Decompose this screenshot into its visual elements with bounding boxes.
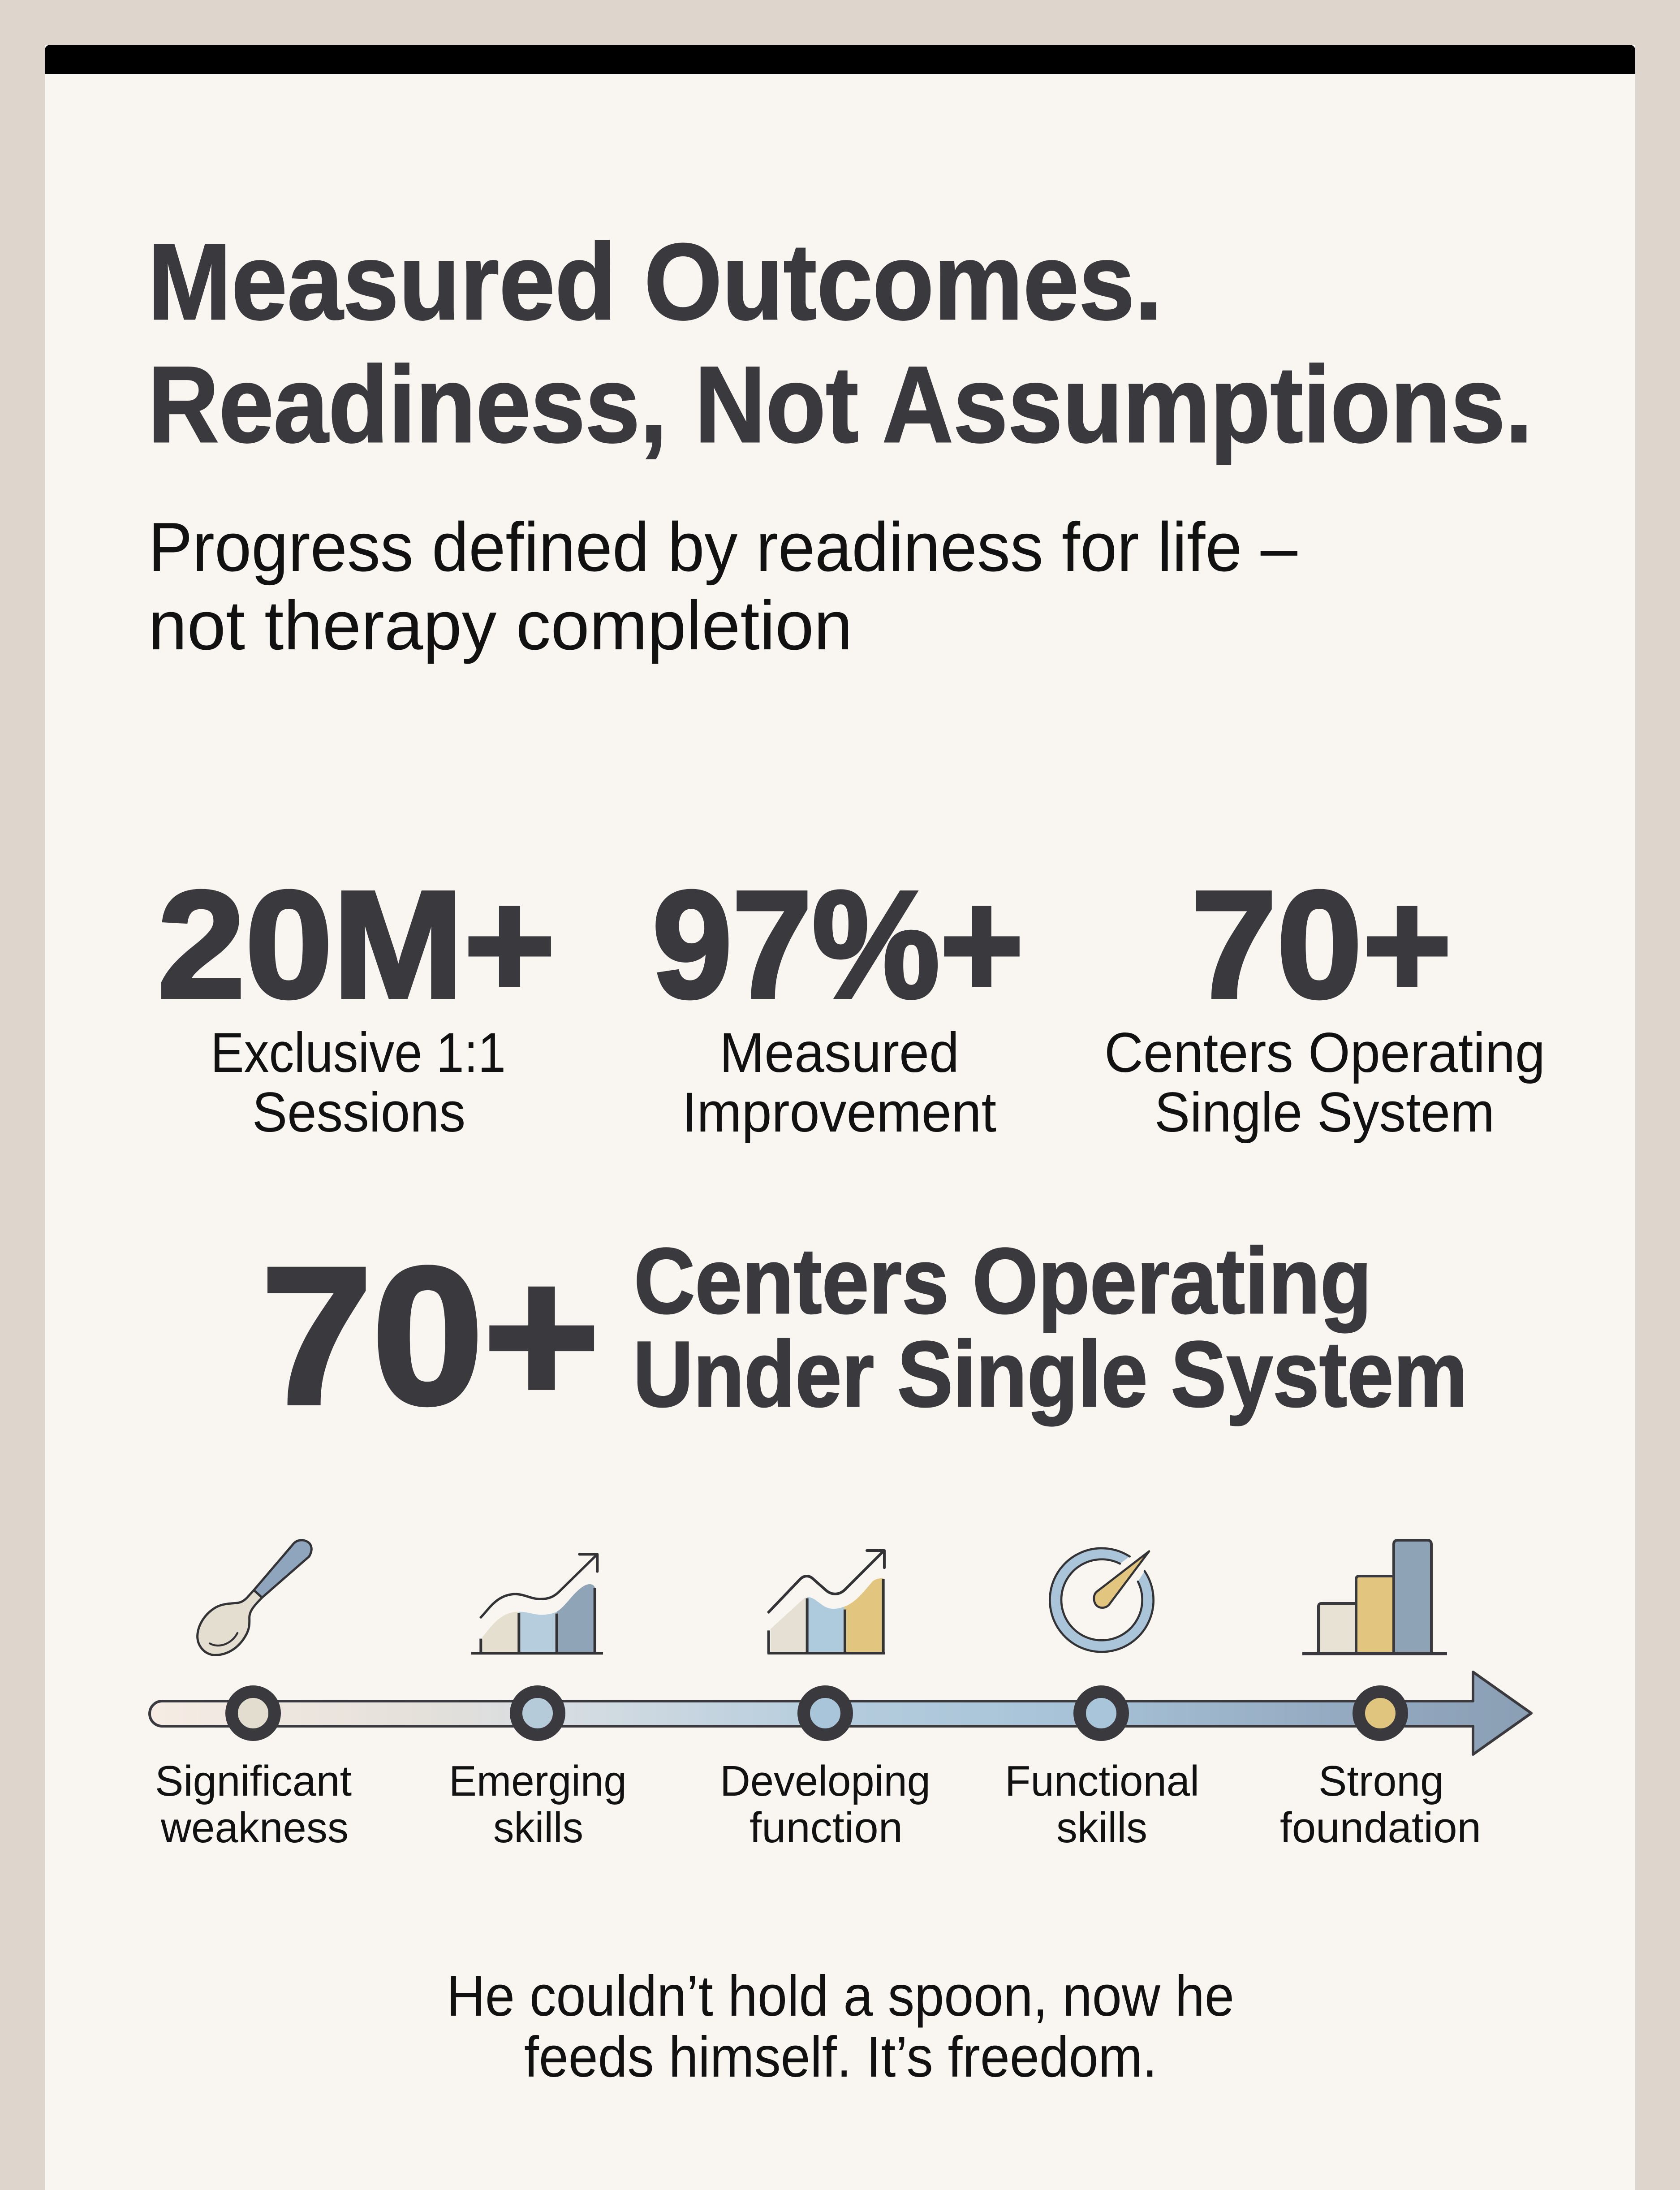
milestone node 4 bbox=[1080, 1692, 1123, 1735]
subtitle: not therapy completion bbox=[148, 587, 853, 664]
milestone node 5 bbox=[1359, 1692, 1402, 1735]
milestone node 2 bbox=[516, 1692, 559, 1735]
label: strong foundation bbox=[1280, 1757, 1481, 1852]
label: functional skills bbox=[1005, 1757, 1199, 1852]
stat: 70+ centers: Single System bbox=[1154, 1081, 1495, 1144]
stat: 97%+ improvement: Measured bbox=[719, 1022, 959, 1084]
stat: 70+ centers: 70+ bbox=[1191, 860, 1452, 1030]
label: developing function bbox=[720, 1757, 930, 1852]
milestone node 3 bbox=[804, 1692, 847, 1735]
stat: 70+ centers bbox=[1104, 860, 1545, 1144]
label: functional skills: skills bbox=[1056, 1804, 1147, 1852]
stat: 20M+ sessions bbox=[158, 860, 556, 1144]
label: significant weakness bbox=[155, 1757, 352, 1852]
stat: 20M+ sessions: Exclusive 1:1 bbox=[211, 1022, 506, 1084]
label: significant weakness: weakness bbox=[160, 1804, 349, 1852]
label: developing function: Developing bbox=[720, 1757, 930, 1805]
subtitle bbox=[148, 508, 1298, 664]
label: strong foundation: foundation bbox=[1280, 1804, 1481, 1852]
icon: bars bbox=[1302, 1540, 1447, 1654]
quote bbox=[447, 1964, 1234, 2089]
icon: gauge bbox=[1050, 1548, 1154, 1652]
label: emerging skills: skills bbox=[493, 1804, 583, 1852]
callout: 70+ centers under single system: Centers Operating bbox=[634, 1229, 1372, 1333]
callout: 70+ centers under single system bbox=[261, 1227, 1468, 1445]
arrow: progress track bbox=[150, 1672, 1531, 1754]
top black bar bbox=[45, 45, 1635, 74]
stat: 97%+ improvement: 97%+ bbox=[652, 860, 1024, 1030]
stat: 20M+ sessions: 20M+ bbox=[158, 860, 556, 1030]
stat: 20M+ sessions: Sessions bbox=[252, 1081, 465, 1144]
icon: emerging chart bbox=[471, 1554, 603, 1653]
title: Measured Outcomes. bbox=[148, 221, 1163, 342]
callout: 70+ centers under single system: Under Single System bbox=[633, 1322, 1468, 1426]
label: functional skills: Functional bbox=[1005, 1757, 1199, 1805]
quote: He couldn’t hold a spoon, now he bbox=[447, 1964, 1234, 2028]
subtitle: Progress defined by readiness for life – bbox=[148, 508, 1298, 586]
quote: feeds himself. It’s freedom. bbox=[524, 2025, 1157, 2089]
stat: 97%+ improvement bbox=[652, 860, 1024, 1144]
label: significant weakness: Significant bbox=[155, 1757, 352, 1805]
stat: 97%+ improvement: Improvement bbox=[682, 1081, 996, 1144]
milestone node 1 bbox=[232, 1692, 275, 1735]
label: strong foundation: Strong bbox=[1318, 1757, 1444, 1805]
title bbox=[148, 221, 1533, 465]
label: emerging skills: Emerging bbox=[449, 1757, 627, 1805]
label: emerging skills bbox=[449, 1757, 627, 1852]
title: Readiness, Not Assumptions. bbox=[148, 344, 1533, 465]
icon: developing chart bbox=[767, 1550, 885, 1654]
callout: 70+ centers under single system: 70+ bbox=[261, 1227, 600, 1445]
icon: spoon bbox=[198, 1540, 311, 1655]
stat: 70+ centers: Centers Operating bbox=[1104, 1022, 1545, 1084]
label: developing function: function bbox=[750, 1804, 903, 1852]
